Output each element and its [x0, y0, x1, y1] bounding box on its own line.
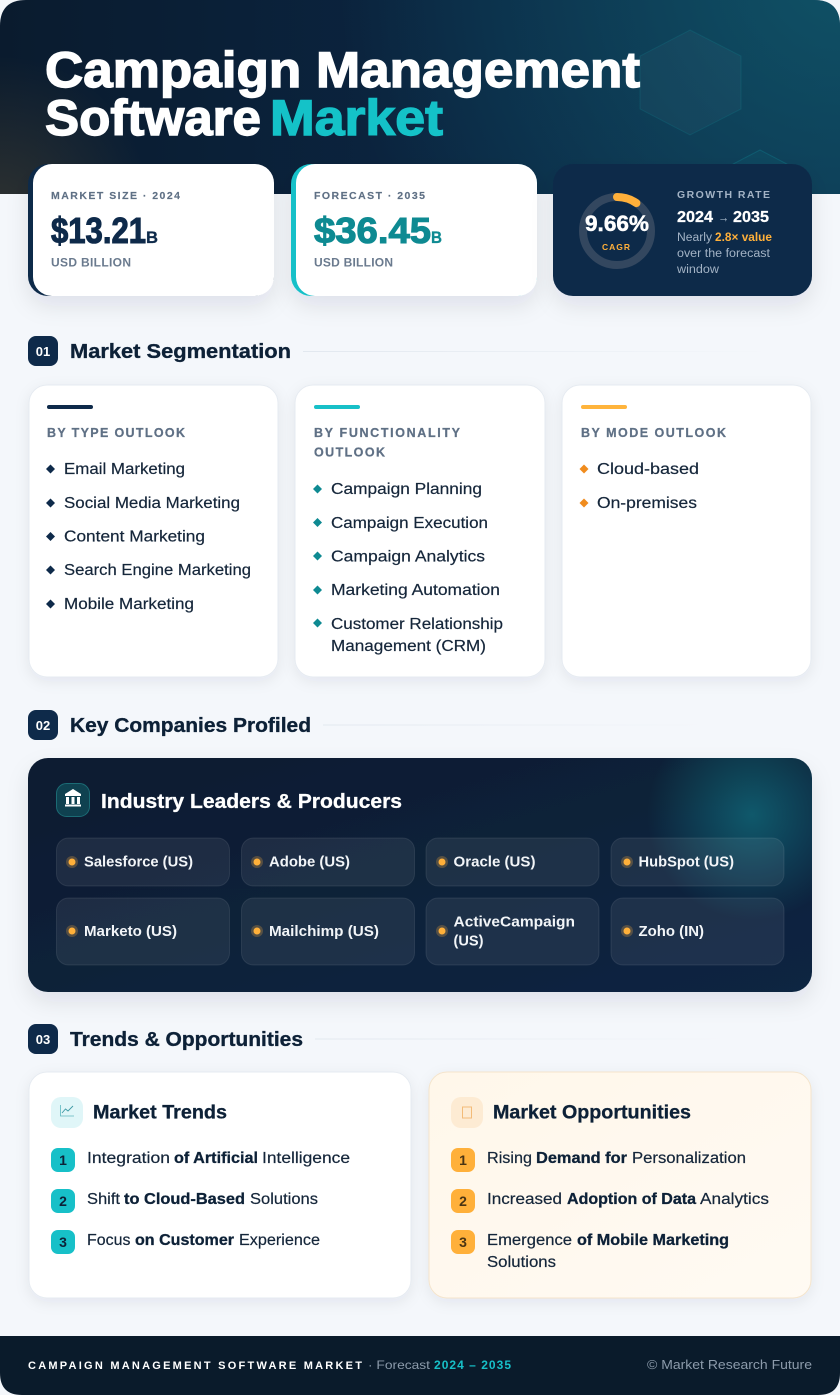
stat card: growth rate — [553, 164, 812, 296]
panel: market trends — [29, 1072, 411, 1298]
company: Zoho — [611, 898, 784, 965]
decorative hexagon — [640, 30, 741, 135]
trend 2 — [51, 1189, 318, 1213]
growth rate text — [676, 189, 772, 276]
trend 3: on Customer — [135, 1232, 234, 1249]
opportunity 3: 3 — [459, 1234, 467, 1250]
trend 1: Intelligence — [262, 1150, 350, 1167]
opportunity 1: Personalization — [632, 1150, 746, 1167]
growth rate text: GROWTH RATE — [677, 189, 770, 201]
panel: by type outlook: Content Marketing — [64, 528, 205, 546]
growth rate text: 2024 — [677, 209, 713, 226]
panel: by mode outlook: Cloud-based — [597, 461, 699, 478]
title — [45, 42, 640, 146]
opportunity 3: Solutions — [487, 1254, 556, 1271]
stat card: market size 2024: $13.21 — [51, 210, 146, 251]
opportunity 1 — [451, 1148, 746, 1172]
panel: by functionality outlook: Marketing Automation — [331, 582, 500, 599]
section heading 01 — [28, 336, 773, 366]
panel: by type outlook: BY TYPE OUTLOOK — [47, 426, 185, 440]
company: Oracle: Oracle (US) — [454, 854, 536, 870]
growth rate text: 2.8× value — [715, 232, 772, 244]
company: HubSpot — [611, 838, 784, 886]
company: Marketo — [56, 898, 230, 965]
company: Adobe: Adobe (US) — [269, 854, 350, 870]
trend 2: to Cloud-Based — [124, 1191, 245, 1208]
panel: by mode outlook: On-premises — [597, 495, 697, 512]
opportunity 3: of Mobile Marketing — [577, 1232, 729, 1249]
trend 1: 1 — [59, 1152, 67, 1168]
stat card: forecast 2035: FORECAST · 2035 — [314, 190, 425, 202]
panel: by type outlook: Email Marketing — [64, 461, 185, 478]
opportunity 2: 2 — [459, 1193, 467, 1209]
growth rate text: window — [676, 264, 720, 276]
stat card: forecast 2035: USD BILLION — [314, 256, 393, 270]
opportunity 2 — [451, 1189, 769, 1213]
panel: by functionality outlook — [295, 385, 545, 677]
footer: © Market Research Future — [647, 1358, 812, 1372]
trend 3 — [51, 1230, 320, 1254]
growth rate text: → — [718, 209, 729, 225]
heading: market opportunities: Market Opportunities — [493, 1102, 691, 1124]
panel: by functionality outlook: Customer Relationship — [331, 616, 503, 633]
footer — [0, 1336, 840, 1395]
panel: by functionality outlook: Management (CRM) — [331, 638, 486, 655]
trend 2: 2 — [59, 1193, 67, 1209]
panel: by type outlook: Search Engine Marketing — [64, 562, 251, 579]
heading: industry leaders: Industry Leaders & Producers — [101, 790, 402, 813]
company: Adobe — [242, 838, 414, 886]
opportunity 1: Demand for — [536, 1150, 627, 1167]
section heading 02: Key Companies Profiled — [70, 714, 311, 737]
icon: bank — [56, 784, 90, 816]
CAGR gauge: 9.66% — [585, 211, 649, 236]
section heading 02: 02 — [36, 718, 50, 733]
panel: by functionality outlook: Campaign Execution — [331, 515, 488, 532]
trend 2: Solutions — [250, 1191, 318, 1208]
company: ActiveCampaign: ActiveCampaign — [454, 914, 575, 930]
panel: by mode outlook: BY MODE OUTLOOK — [581, 426, 726, 440]
stat card: forecast 2035: B — [431, 228, 442, 247]
title: Campaign Management — [45, 42, 640, 98]
title: Market — [270, 90, 443, 146]
icon: chart — [51, 1097, 83, 1128]
stat card: market size 2024: MARKET SIZE · 2024 — [51, 190, 180, 202]
company: Marketo: Marketo (US) — [84, 924, 177, 940]
trend 2: Shift — [87, 1191, 121, 1208]
company: Oracle — [426, 838, 599, 886]
icon: opportunities — [451, 1097, 483, 1128]
panel: by type outlook — [29, 385, 278, 677]
company: ActiveCampaign: (US) — [454, 934, 484, 950]
panel: by mode outlook — [562, 385, 811, 677]
stat card: market size 2024: B — [146, 228, 158, 247]
stat card: forecast 2035: $36.45 — [314, 210, 431, 251]
trend 3: Experience — [239, 1232, 320, 1249]
trend 3: 3 — [59, 1234, 67, 1250]
trend 1: Integration — [87, 1150, 170, 1167]
growth rate text: Nearly — [677, 232, 712, 244]
company: ActiveCampaign — [426, 898, 599, 965]
company: Mailchimp — [242, 898, 414, 965]
panel: by functionality outlook: Campaign Analytics — [331, 548, 485, 566]
panel: by type outlook: Social Media Marketing — [64, 495, 240, 512]
company: Salesforce: Salesforce (US) — [84, 854, 193, 870]
company: Mailchimp: Mailchimp (US) — [269, 924, 379, 940]
stat card: market size 2024 — [28, 164, 274, 296]
trend 1 — [51, 1148, 350, 1172]
header banner — [0, 0, 840, 194]
opportunity 2: Adoption of Data — [567, 1191, 696, 1208]
CAGR gauge — [583, 197, 651, 265]
section heading 02 — [28, 710, 713, 740]
company: Zoho: Zoho (IN) — [638, 924, 704, 940]
footer: · Forecast — [368, 1358, 431, 1372]
panel: market opportunities — [429, 1072, 811, 1298]
trend 1: of Artificial — [174, 1150, 258, 1167]
company: HubSpot: HubSpot (US) — [638, 854, 734, 870]
footer: 2024 – 2035 — [434, 1358, 511, 1372]
trend 3: Focus — [87, 1232, 131, 1249]
section heading 03: 03 — [36, 1032, 50, 1047]
panel: by functionality outlook: OUTLOOK — [314, 446, 385, 460]
company: Salesforce — [56, 838, 230, 886]
growth rate text: 2035 — [733, 209, 769, 226]
opportunity 2: Increased — [487, 1191, 562, 1208]
opportunity 3 — [451, 1230, 729, 1271]
title: Software — [45, 90, 261, 146]
opportunity 2: Analytics — [700, 1191, 769, 1208]
section heading 01: Market Segmentation — [70, 340, 291, 363]
growth rate text: over the forecast — [677, 248, 771, 260]
opportunity 1: 1 — [459, 1152, 467, 1168]
heading: market trends: Market Trends — [93, 1102, 227, 1124]
panel: by functionality outlook: BY FUNCTIONALITY — [314, 426, 461, 440]
section heading 03: Trends & Opportunities — [70, 1028, 303, 1051]
section heading 03 — [28, 1024, 735, 1054]
opportunity 3: Emergence — [487, 1232, 572, 1249]
section heading 01: 01 — [36, 344, 50, 359]
panel: by type outlook: Mobile Marketing — [64, 596, 194, 613]
stat card: market size 2024: USD BILLION — [51, 256, 131, 270]
stat card: forecast 2035 — [291, 164, 537, 296]
panel: by functionality outlook: Campaign Planning — [331, 481, 482, 498]
opportunity 1: Rising — [487, 1150, 532, 1167]
CAGR gauge: CAGR — [602, 242, 630, 252]
footer: CAMPAIGN MANAGEMENT SOFTWARE MARKET — [28, 1360, 362, 1372]
panel: key companies — [28, 758, 812, 992]
